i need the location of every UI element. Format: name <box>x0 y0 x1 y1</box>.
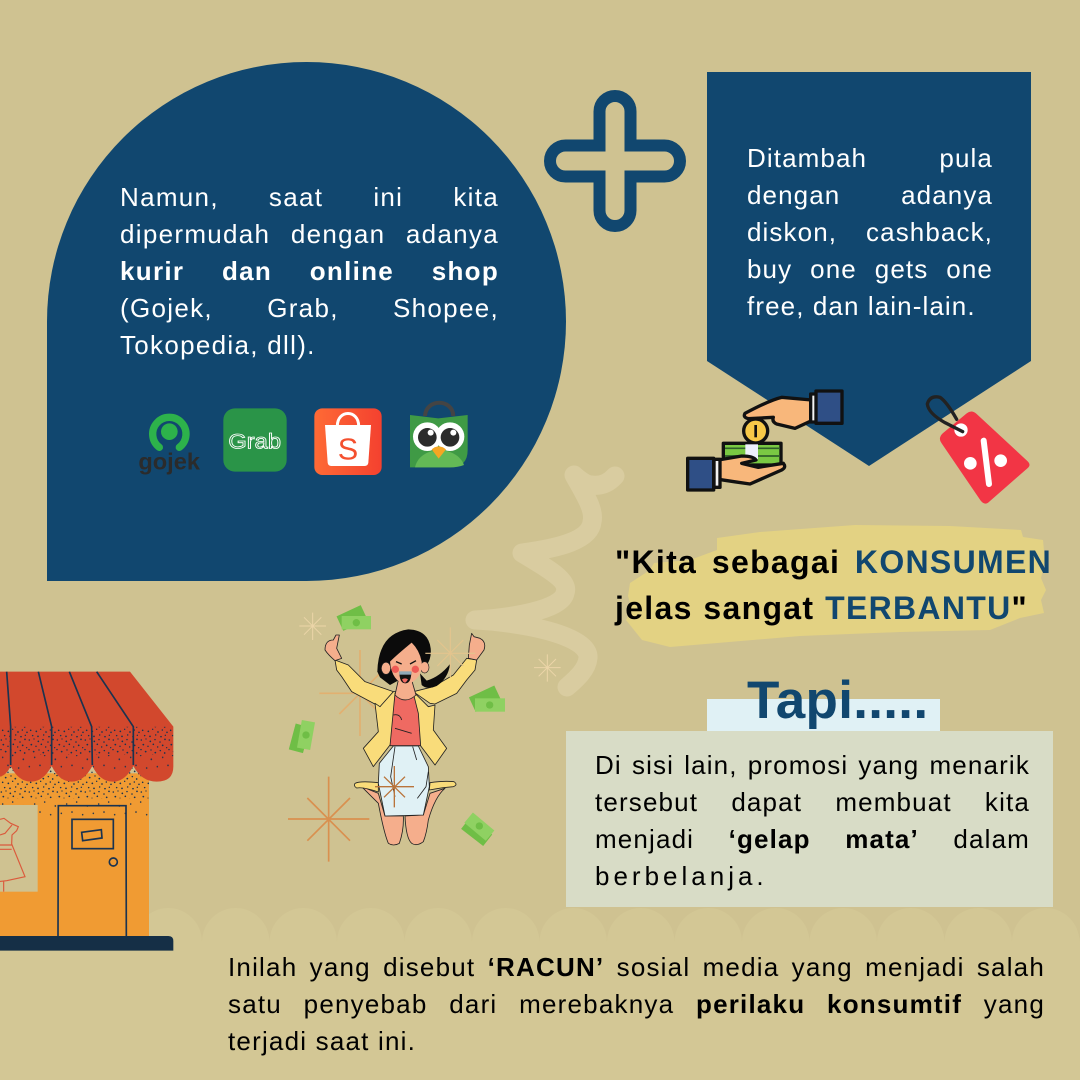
sparkle: large behind arm <box>319 650 400 736</box>
sparkle: right small <box>534 654 561 682</box>
awning <box>0 672 173 782</box>
sparkle: small top left <box>299 613 326 640</box>
logo: grab <box>223 408 287 472</box>
logo: tokopedia owl <box>410 403 468 467</box>
text: namun saat ini: (Gojek, Grab, Shopee, <box>120 293 499 323</box>
arms <box>335 660 393 713</box>
text: racun sosial media: terjadi saat ini. <box>228 1026 416 1056</box>
door <box>58 806 126 937</box>
logo: gojek <box>138 417 200 474</box>
neck <box>395 680 416 700</box>
sparkle: large lower left <box>288 777 369 862</box>
text: namun saat ini <box>120 182 499 360</box>
text: racun sosial media <box>228 952 1045 1056</box>
text: ditambah pula: diskon, cashback, <box>747 217 993 247</box>
text: di sisi lain: berbelanja. <box>595 861 768 891</box>
text: di sisi lain: Di sisi lain, promosi yang menarik <box>595 750 1030 780</box>
logo: shopee: S <box>338 432 358 466</box>
text: di sisi lain: tersebut dapat membuat kita <box>595 787 1030 817</box>
logo: gojek: gojek <box>138 448 200 474</box>
text: ditambah pula: dengan adanya <box>747 180 993 210</box>
quote: kita sebagai konsumen: jelas sangat TERBANTU" <box>615 590 1028 626</box>
top <box>390 693 421 746</box>
awning speckle <box>0 727 173 772</box>
tapi label background <box>707 699 940 731</box>
text: di sisi lain: menjadi ‘gelap mata’ dalam <box>595 824 1030 854</box>
store wall <box>0 773 149 938</box>
text: namun saat ini: dipermudah dengan adanya <box>120 219 499 249</box>
text: ditambah pula: buy one gets one <box>747 254 993 284</box>
shop window with dress <box>0 805 38 892</box>
logo: grab: Grab <box>228 430 281 454</box>
woman legs and shoes <box>325 633 485 845</box>
text: ditambah pula <box>747 143 993 321</box>
awning stripes <box>7 672 133 765</box>
text: namun saat ini: Tokopedia, dll). <box>120 330 316 360</box>
illustration: store <box>0 671 174 951</box>
highlight brush stroke <box>626 525 1046 647</box>
text: racun sosial media: Inilah yang disebut ‘RACUN’ sosial media yang menjadi salah <box>228 952 1045 982</box>
bottom scalloped band <box>0 908 1080 1080</box>
money: bottom right <box>461 813 494 846</box>
quote: kita sebagai konsumen <box>614 544 1052 626</box>
text: ditambah pula: Ditambah pula <box>747 143 993 173</box>
logo: shopee <box>314 408 382 475</box>
text: di sisi lain <box>595 750 1030 891</box>
skirt and jacket folds <box>391 715 428 798</box>
jacket <box>363 692 447 767</box>
store base <box>0 936 173 951</box>
text: namun saat ini: Namun, saat ini kita <box>120 182 499 212</box>
decorative squiggle <box>475 475 615 687</box>
heading: tapi: Tapi..... <box>747 671 928 730</box>
money: right <box>469 685 505 712</box>
panel: di sisi lain <box>566 731 1053 907</box>
skirt <box>378 746 429 816</box>
sparkle: by raised hand <box>425 627 475 677</box>
text: namun saat ini: kurir dan online shop <box>120 256 499 286</box>
money: left <box>289 720 315 753</box>
panel: kurir dan online shop <box>47 62 566 581</box>
hair and face <box>377 629 450 688</box>
wall speckle <box>0 767 149 798</box>
text: ditambah pula: free, dan lain-lain. <box>747 291 976 321</box>
money: top <box>337 605 371 631</box>
text: racun sosial media: satu penyebab dari merebaknya perilaku konsumtif yang <box>228 989 1045 1019</box>
sparkle: on skirt <box>375 766 414 807</box>
quote: kita sebagai konsumen: "Kita sebagai KONSUMEN <box>615 544 1052 580</box>
